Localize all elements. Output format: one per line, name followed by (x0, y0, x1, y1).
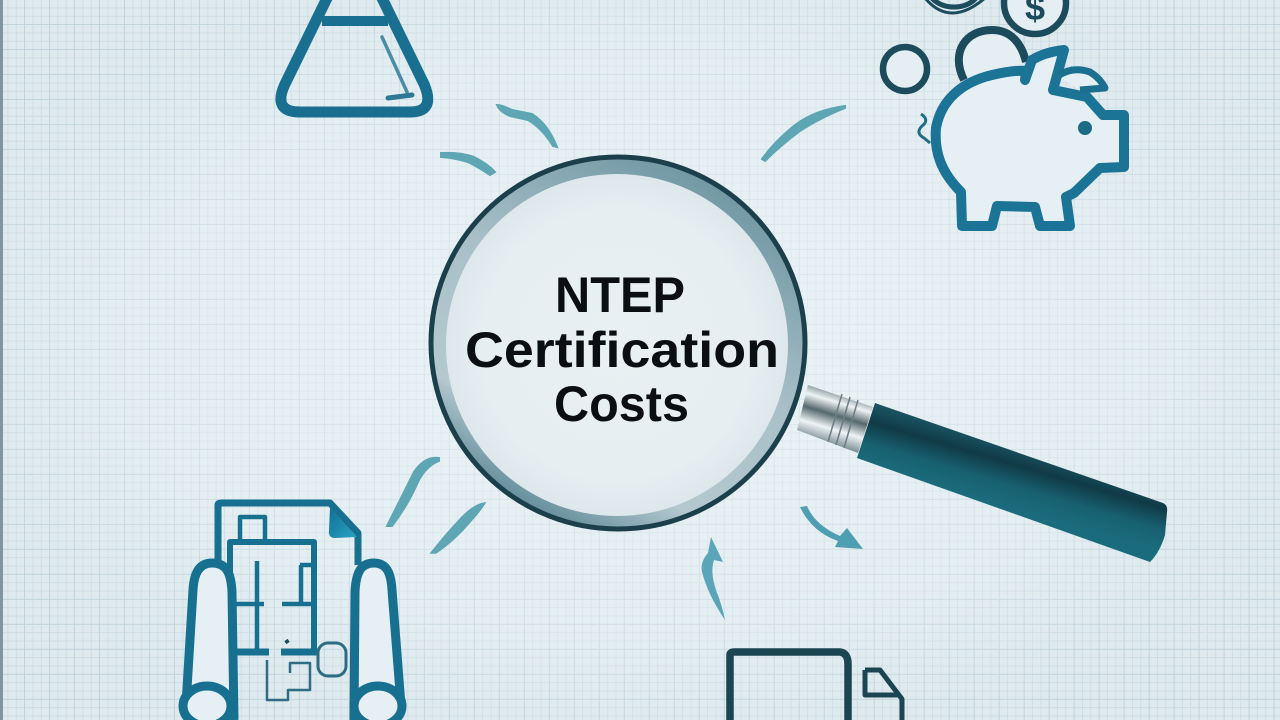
magnifying glass (431, 157, 1167, 562)
arrow: bottom centre (702, 537, 725, 620)
motion stroke: lower left lower (431, 503, 485, 553)
floor plan (230, 517, 346, 700)
title line 3: Costs (554, 376, 689, 432)
handle grip (857, 403, 1167, 562)
coin stack, top (925, 0, 985, 13)
title (465, 267, 779, 432)
motion stroke: top left lower (441, 153, 495, 175)
right roll (354, 563, 402, 720)
motion stroke: top left upper (497, 105, 557, 147)
motion stroke: top right (762, 106, 845, 161)
pig ear inner (1058, 70, 1105, 90)
pig eye (1078, 121, 1092, 135)
folded corner (329, 508, 357, 538)
document sheet (218, 503, 358, 565)
icon: blueprint rolls and plan (183, 503, 402, 720)
title line 2: Certification (465, 322, 779, 378)
handle ferrule (797, 385, 873, 453)
pig tail (919, 114, 930, 143)
lens glass (446, 174, 788, 516)
icon: flask (281, 0, 428, 112)
lens frame (431, 157, 805, 529)
loose coin (883, 47, 927, 91)
pig body (936, 50, 1124, 226)
coin entering slot (959, 30, 1026, 80)
arrow: lower right (800, 506, 863, 549)
left roll (183, 563, 234, 720)
dollar coin (1004, 0, 1066, 34)
motion stroke: lower left upper (387, 458, 439, 526)
title line 1: NTEP (555, 267, 685, 323)
icon: piggy bank with coins (883, 0, 1124, 226)
icon: documents at bottom (730, 652, 902, 720)
